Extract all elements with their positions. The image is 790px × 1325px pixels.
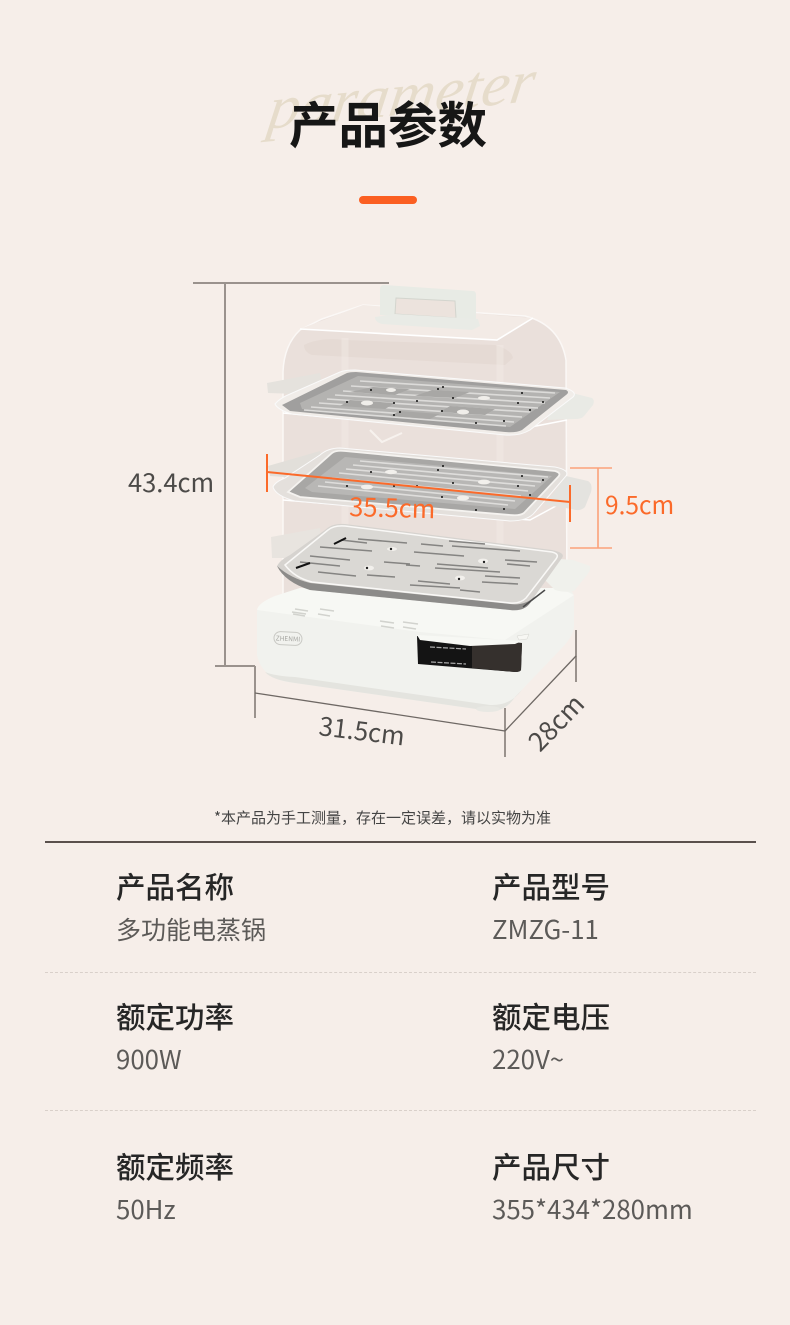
lid handle	[375, 285, 480, 330]
water tank window	[417, 634, 529, 672]
spec value: rated voltage: 220V~	[492, 1040, 564, 1077]
base unit	[257, 588, 574, 712]
middle tray handles	[268, 451, 592, 510]
spec value: model: ZMZG-11	[492, 910, 599, 947]
steamer product diagram	[128, 282, 674, 759]
spec: product size: 产品尺寸	[492, 1145, 610, 1187]
top tray	[275, 370, 574, 435]
spec: rated power: 额定功率	[116, 995, 234, 1037]
base control marks	[292, 609, 418, 629]
spec value: product size: 355*434*280mm	[492, 1190, 693, 1227]
measurement note: *本产品为手工测量，存在一定误差，请以实物为准	[214, 807, 551, 828]
label: 43.4cm: 43.4cm	[128, 463, 214, 500]
spec value: rated frequency: 50Hz	[116, 1190, 176, 1227]
spec value: rated power: 900W	[116, 1040, 182, 1077]
label: 31.5cm: 31.5cm	[317, 706, 407, 753]
tray height dimension lines	[570, 468, 612, 548]
title: 产品参数	[289, 87, 487, 158]
spec value: product name: 多功能电蒸锅	[116, 911, 266, 947]
spec: model: 产品型号	[492, 865, 610, 907]
width and depth dimension lines	[255, 630, 576, 757]
bottom tray handles	[271, 528, 590, 592]
spec: rated voltage: 额定电压	[492, 995, 610, 1037]
height dimension lines	[193, 283, 389, 666]
bottom tray	[277, 524, 563, 610]
table top divider	[45, 841, 756, 843]
steamer transparent tower	[283, 305, 567, 605]
middle tray	[273, 448, 567, 521]
title accent bar	[359, 196, 417, 204]
label: 35.5cm: 35.5cm	[349, 487, 436, 526]
logo: ZHENMI: ZHENMI	[276, 632, 301, 644]
spec: product name: 产品名称	[116, 865, 234, 907]
logo: ZHENMI	[274, 631, 302, 646]
label: 28cm: 28cm	[519, 685, 592, 759]
spec: rated frequency: 额定频率	[116, 1145, 234, 1187]
label: 9.5cm: 9.5cm	[605, 487, 674, 522]
tray width dimension line	[267, 454, 570, 522]
top tray handles	[267, 373, 594, 420]
